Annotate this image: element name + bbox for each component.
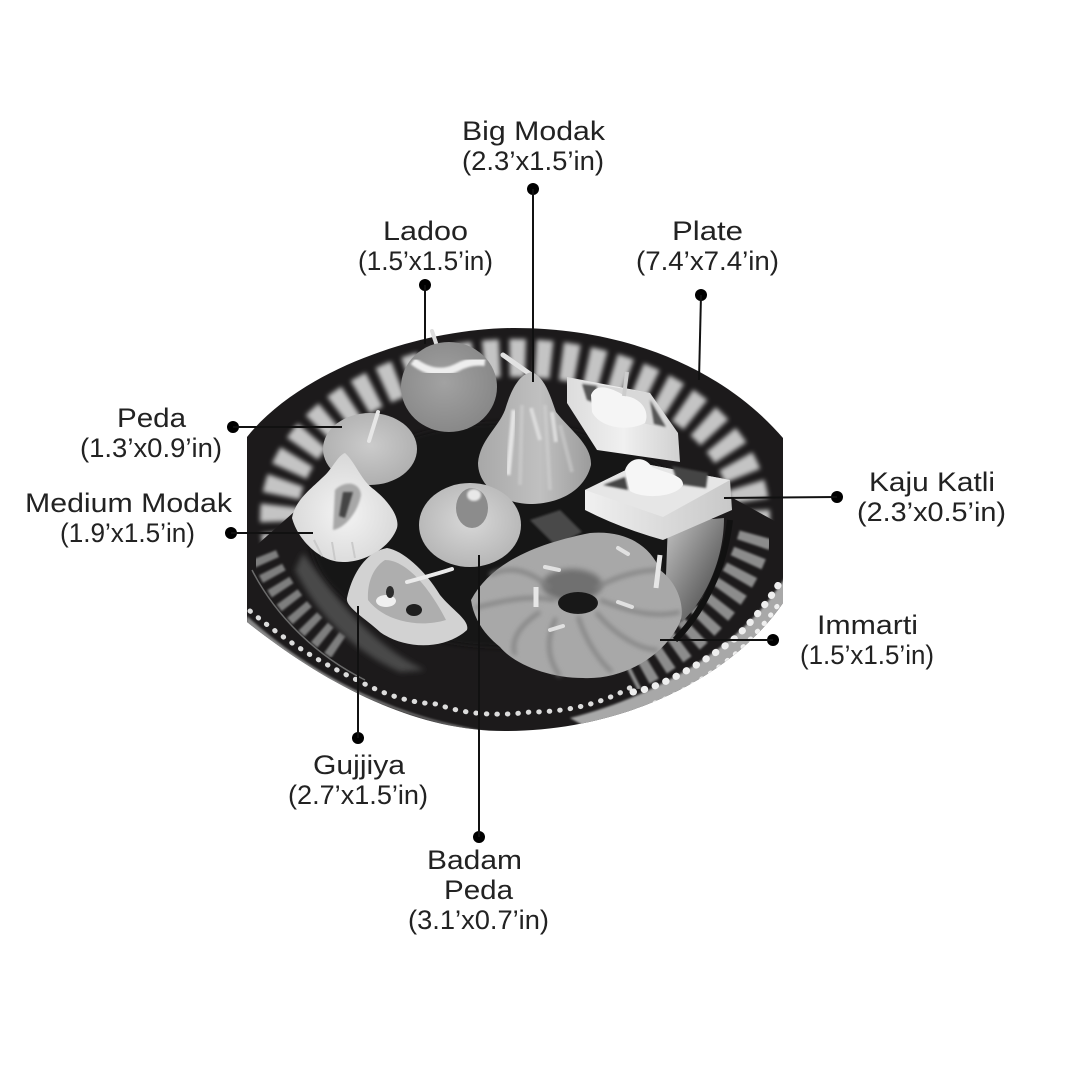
callout: Medium Modak: Medium Modak — [25, 488, 233, 518]
callout: Ladoo: Ladoo — [383, 216, 468, 246]
plate beaded dots right — [633, 577, 783, 692]
plate lower-left ribs — [264, 555, 340, 648]
callout: Medium Modak — [25, 488, 313, 548]
sweet: medium modak — [292, 453, 397, 562]
callout: Peda: (1.3’x0.9’in) — [80, 433, 222, 463]
callout: Plate: Plate — [672, 216, 743, 246]
plate lower-right ribs — [630, 535, 756, 675]
sweet: back kaju katli — [567, 372, 680, 462]
sweet: immarti — [471, 533, 682, 678]
callout: Plate — [636, 216, 779, 380]
callout: Big Modak: (2.3’x1.5’in) — [462, 146, 604, 176]
callout: Badam Peda: Badam — [427, 845, 522, 875]
sweet: badam peda — [419, 483, 521, 567]
callout: Big Modak: Big Modak — [462, 116, 606, 146]
plate — [240, 320, 795, 740]
callout: Gujjiya: (2.7’x1.5’in) — [288, 780, 428, 810]
callout: Kaju Katli — [724, 467, 1006, 527]
callout: Badam Peda: Peda — [444, 875, 514, 905]
sweet: big modak — [478, 355, 591, 504]
sweet: peda — [323, 412, 417, 485]
callout: Kaju Katli: (2.3’x0.5’in) — [857, 497, 1006, 527]
callout: Medium Modak: (1.9’x1.5’in) — [60, 518, 195, 548]
plate centre — [416, 425, 652, 645]
callout: Ladoo: (1.5’x1.5’in) — [358, 246, 493, 276]
callout: Peda: Peda — [117, 403, 187, 433]
plate upper ribs — [256, 336, 774, 543]
callout: Immarti: Immarti — [817, 610, 918, 640]
plate lower-left rim — [247, 616, 484, 730]
plate lower-right rim — [570, 578, 783, 724]
callout: Immarti — [660, 610, 934, 670]
callout: Immarti: (1.5’x1.5’in) — [800, 640, 934, 670]
sweet: front kaju katli — [585, 459, 732, 540]
sweet: gujjiya — [347, 548, 467, 645]
callout: Badam Peda — [408, 555, 549, 935]
callout: Gujjiya: Gujjiya — [313, 750, 406, 780]
callout: Gujjiya — [288, 606, 428, 810]
callout: Badam Peda: (3.1’x0.7’in) — [408, 905, 549, 935]
plate beaded dots — [250, 611, 633, 714]
callout: Big Modak — [462, 116, 606, 382]
sweet: ladoo — [401, 331, 497, 432]
callout: Ladoo — [358, 216, 493, 344]
callout: Plate: (7.4’x7.4’in) — [636, 246, 779, 276]
plate inner bowl — [666, 518, 724, 622]
callout: Kaju Katli: Kaju Katli — [869, 467, 995, 497]
callout: Peda — [80, 403, 342, 463]
